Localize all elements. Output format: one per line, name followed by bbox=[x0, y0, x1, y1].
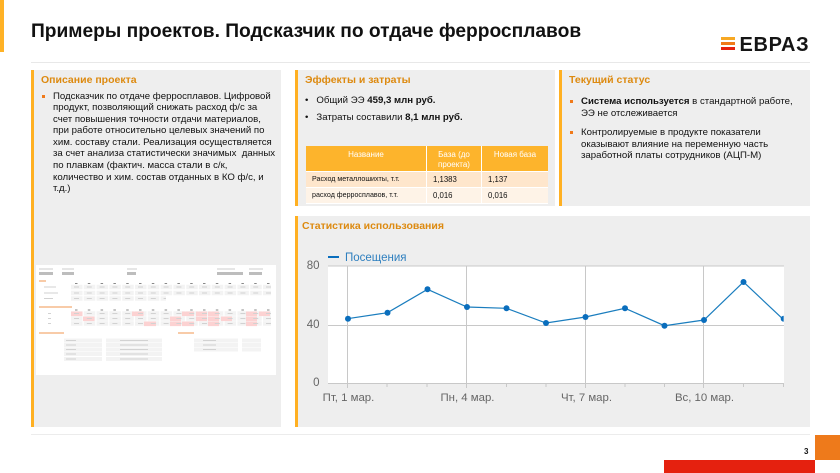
table row: ferroalloys: расход ферросплавов, т.т. bbox=[312, 190, 398, 198]
heading: effects and costs: Эффекты и затраты bbox=[305, 74, 411, 86]
text: project description: Подсказчик по отдаче ферросплавов. Цифровой bbox=[53, 90, 271, 102]
x axis labels bbox=[323, 392, 734, 404]
heading: usage statistics: Статистика использования bbox=[302, 220, 444, 232]
status item 2 bbox=[570, 127, 768, 161]
heading: current status: Текущий статус bbox=[569, 74, 650, 86]
heading: project description: Описание проекта bbox=[41, 74, 137, 86]
panel: usage statistics bbox=[295, 216, 810, 427]
text: project description: количество и хим. состав отданных в КО ф/с, и bbox=[53, 172, 264, 183]
table header bbox=[306, 146, 548, 171]
legend: Посещения bbox=[345, 252, 407, 264]
y axis labels: 40 bbox=[307, 319, 320, 331]
bullet: costs: • Затраты составили 8,1 млн руб. bbox=[305, 112, 463, 122]
bullet marker bbox=[42, 95, 45, 98]
table header: Название bbox=[348, 150, 384, 158]
table row: ferroalloys bbox=[306, 188, 548, 203]
accent bar bbox=[0, 0, 4, 52]
page number: 3 bbox=[804, 447, 808, 456]
y axis labels bbox=[307, 260, 320, 389]
status item 2: оказывают влияние на переменную часть bbox=[581, 139, 768, 150]
text: project description: продукт, позволяющий снижать расход ф/с за bbox=[53, 102, 257, 113]
table row: charge: 1,137 bbox=[488, 174, 508, 184]
footer orange square bbox=[815, 435, 840, 460]
text: project description bbox=[53, 90, 275, 194]
bullet: total effect: • Общий ЭЭ 459,3 млн руб. bbox=[305, 94, 435, 106]
table header: База (до bbox=[438, 150, 470, 158]
panel: effects and costs bbox=[295, 70, 555, 206]
table row: ferroalloys: 0,016 bbox=[488, 190, 508, 200]
x axis labels: Пт, 1 мар. bbox=[323, 392, 374, 404]
text: project description: при работе относительно целевых значений по bbox=[53, 125, 264, 136]
data line bbox=[345, 279, 784, 329]
dashboard screenshot bbox=[36, 265, 276, 375]
x axis labels: Пн, 4 мар. bbox=[441, 392, 494, 404]
table header: проекта) bbox=[438, 160, 470, 168]
text: project description: счет повышения точности отдачи материалов, bbox=[53, 114, 261, 125]
x axis labels: Вс, 10 мар. bbox=[675, 392, 734, 404]
x axis labels: Чт, 7 мар. bbox=[561, 392, 612, 404]
y axis labels: 80 bbox=[307, 260, 320, 272]
status item 2: заработной платы сотрудников (АЦП-М) bbox=[581, 150, 761, 161]
status item 1 bbox=[570, 96, 793, 119]
y axis labels: 0 bbox=[313, 377, 320, 389]
table bbox=[306, 146, 548, 204]
footer red bar bbox=[664, 460, 815, 473]
text: project description: хим. составу стали. Реализация осуществляется bbox=[53, 137, 272, 148]
table header: Новая база bbox=[494, 150, 536, 158]
logo: EVRAZ: ЕВРАЗ bbox=[740, 34, 809, 56]
title: Примеры проектов. Подсказчик по отдаче ферросплавов bbox=[31, 21, 581, 42]
table row: ferroalloys: 0,016 bbox=[433, 190, 453, 200]
status item 1: Система используется в стандартной работе, bbox=[581, 96, 793, 107]
table row: charge bbox=[306, 172, 548, 187]
text: project description: за счет анализа статистически значимых данных bbox=[53, 148, 275, 159]
table row: charge: Расход металлошихты, т.т. bbox=[312, 174, 400, 182]
panel: current status bbox=[559, 70, 810, 206]
text: project description: по плавкам (фактич. масса стали в с/к, bbox=[53, 160, 227, 171]
table row: charge: 1,1383 bbox=[433, 174, 457, 184]
status item 2: Контролируемые в продукте показатели bbox=[581, 127, 761, 138]
text: project description: т.д.) bbox=[53, 183, 71, 194]
panel: project description bbox=[31, 70, 281, 427]
status item 1: ЭЭ не отслеживается bbox=[581, 108, 678, 119]
line chart bbox=[307, 252, 784, 404]
